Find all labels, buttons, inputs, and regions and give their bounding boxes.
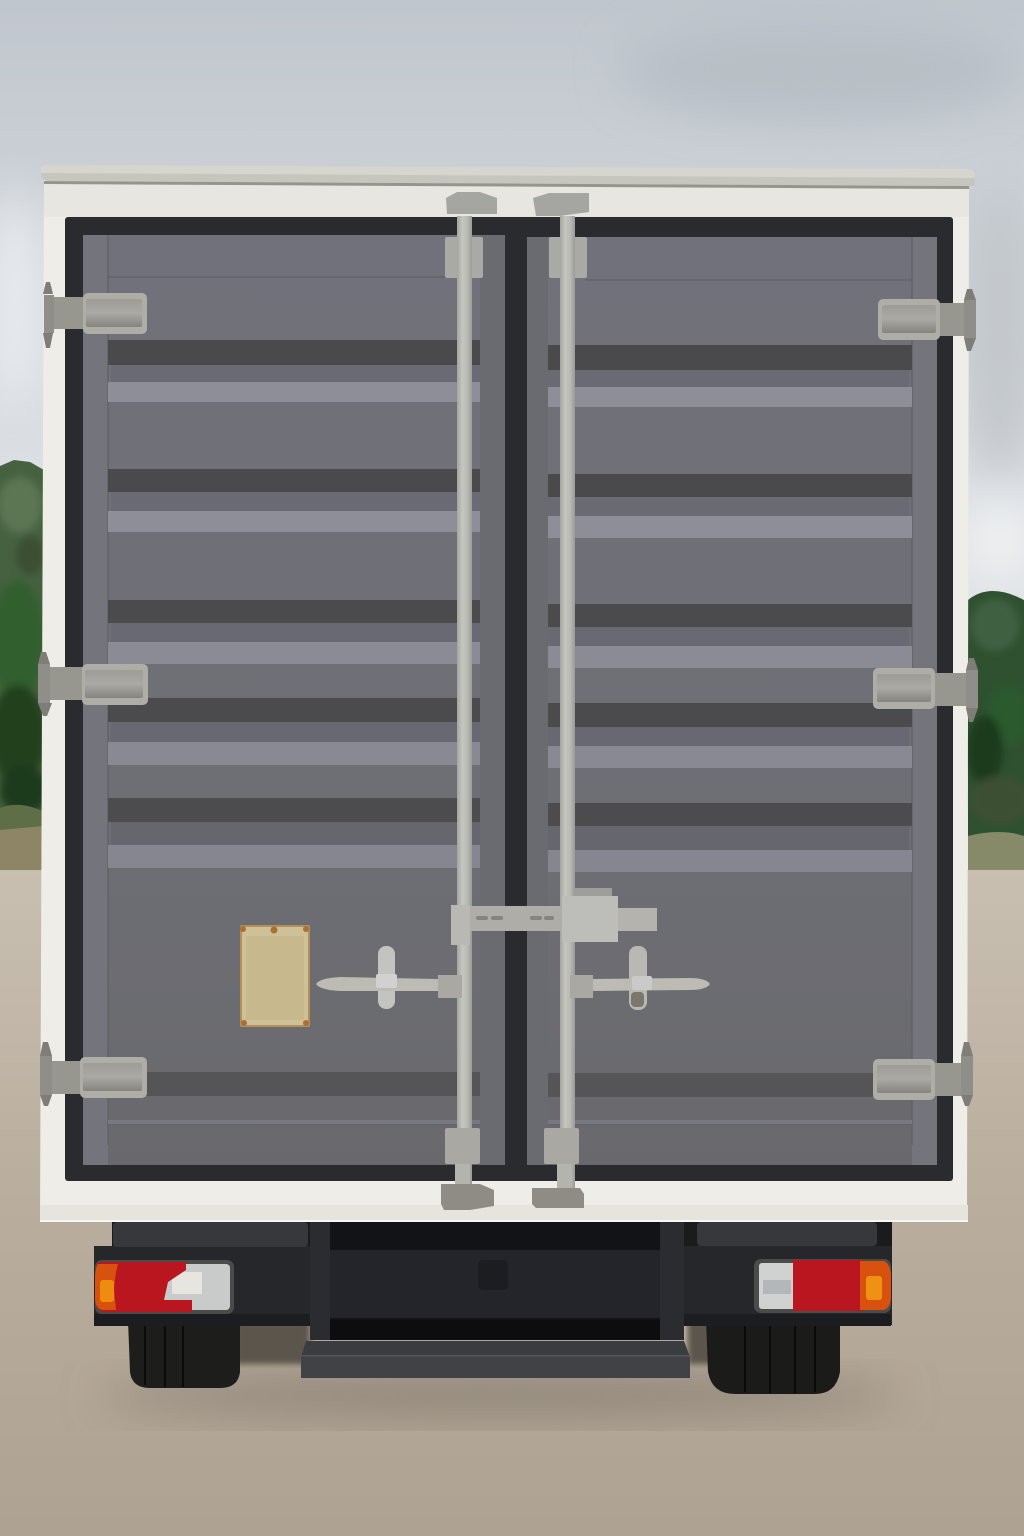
chassis and rear bumper [94,1222,892,1340]
right door [527,237,937,1165]
bottom left hinge [40,1042,147,1106]
right door hinges [873,289,978,1106]
centre door seal [480,217,548,1181]
left door handle [316,946,462,1009]
bottom right hinge [873,1042,973,1106]
right door frame lines [548,237,912,1145]
trees left [0,460,48,872]
top left hinge [43,282,147,348]
centre locking bar and lock box [451,888,657,945]
gravel ground [0,870,1024,1536]
left door [83,235,505,1165]
left door frame lines [108,235,480,1145]
right door corrugations [548,345,912,1124]
left door corrugations [108,340,480,1124]
sky background [0,0,1024,880]
middle left hinge [38,652,148,716]
left lock rod assembly [441,192,497,1210]
left tail light [95,1260,234,1314]
trees right [967,591,1024,872]
right lock rod assembly [532,193,589,1208]
middle right hinge [873,658,978,722]
brass data plate [240,925,310,1027]
black door gasket [65,217,953,1181]
left door hinges [38,282,148,1106]
right tail light [754,1259,891,1313]
top right hinge [878,289,976,351]
roof cap [41,165,975,189]
white box body [40,180,969,1222]
rear step [301,1341,690,1378]
rear tyres [128,1320,840,1394]
right door handle [570,946,710,1010]
